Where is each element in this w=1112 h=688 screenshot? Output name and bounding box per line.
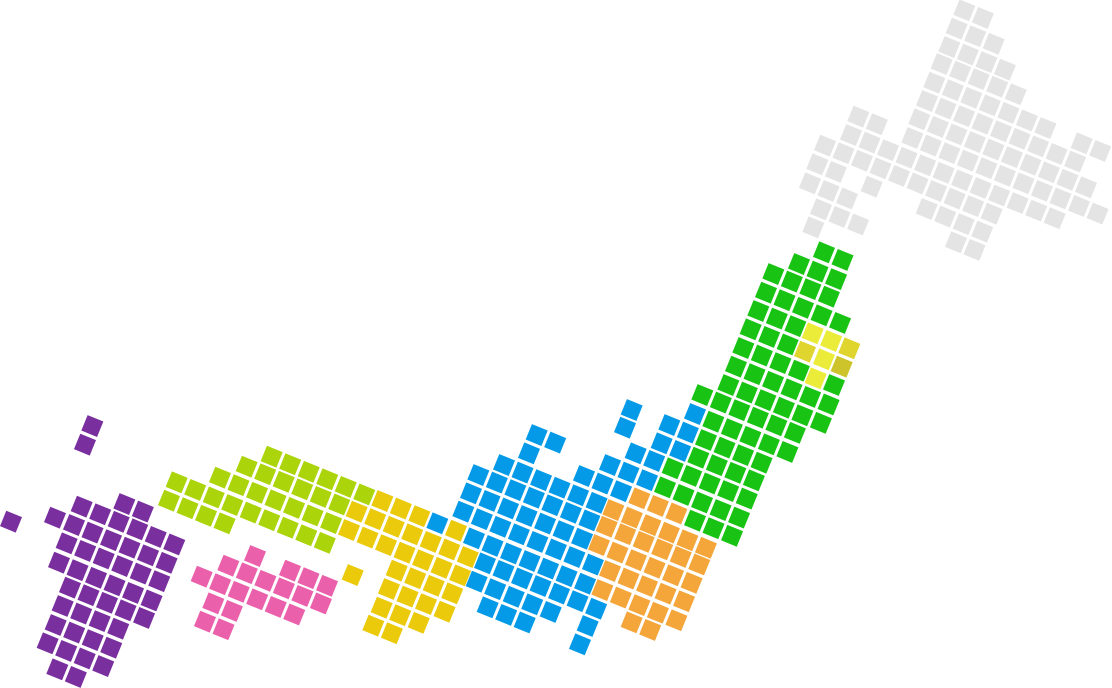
cluster: bright yellow tiles xyxy=(805,330,842,383)
region: Kansai yellow tiles xyxy=(341,498,478,638)
region: Chubu blue tiles xyxy=(429,407,706,649)
cluster: mid yellow tiles xyxy=(797,345,860,356)
region: Kyushu purple tiles xyxy=(3,423,185,681)
region: Tohoku green tiles xyxy=(657,249,853,540)
region: Shikoku pink tiles xyxy=(194,553,338,634)
region: Kanto orange tiles xyxy=(591,495,716,634)
tile: dark yellow xyxy=(834,363,852,371)
region: Hokkaido grey tiles xyxy=(802,7,1111,254)
region: Chugoku lime tiles xyxy=(161,453,375,547)
